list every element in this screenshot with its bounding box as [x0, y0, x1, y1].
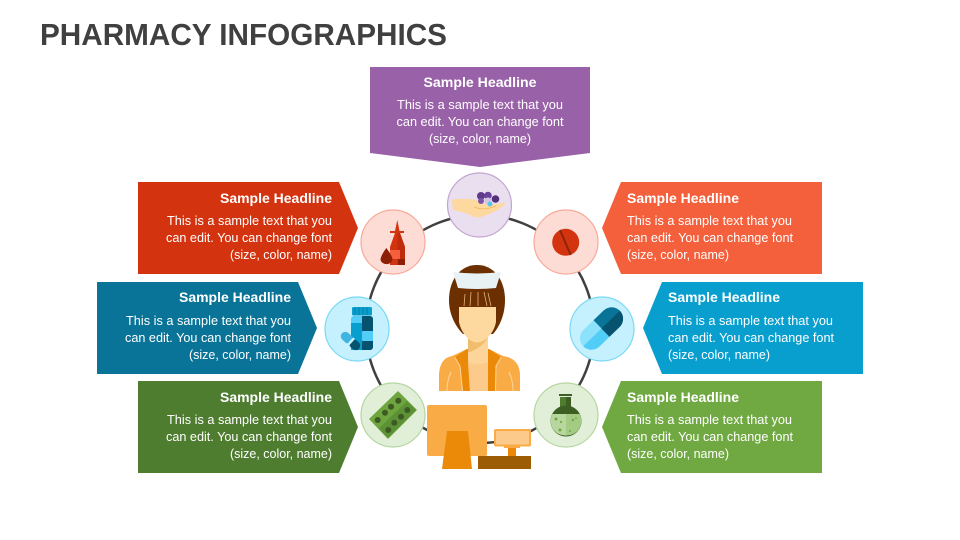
- body text: (size, color, name): [668, 348, 770, 362]
- panel: lower left green: [138, 381, 358, 473]
- body text: [166, 413, 333, 461]
- body text: This is a sample text that you: [126, 314, 291, 328]
- fringe highlights: [464, 292, 491, 306]
- body text: can edit. You can change font: [627, 231, 794, 245]
- shirt and neck: [468, 335, 488, 391]
- body text: can edit. You can change font: [668, 331, 835, 345]
- panel: upper right orange: [602, 182, 822, 274]
- panel: upper left red: [138, 182, 358, 274]
- panel shape: [370, 67, 590, 167]
- jacket: [439, 349, 520, 391]
- body text: [627, 413, 794, 461]
- panel: middle left teal: [97, 282, 317, 374]
- lapels: [455, 349, 501, 391]
- panel shape: [97, 282, 317, 374]
- body text: can edit. You can change font: [166, 231, 333, 245]
- body text: [668, 314, 835, 362]
- body text: (size, color, name): [230, 447, 332, 461]
- neck shadow: [468, 336, 488, 352]
- panel shape: [602, 381, 822, 473]
- body text: (size, color, name): [627, 447, 729, 461]
- body text: [627, 214, 794, 262]
- icon: capsule: [570, 297, 634, 361]
- body text: This is a sample text that you: [668, 314, 833, 328]
- cash register: [478, 430, 531, 469]
- heading: Sample Headline: [220, 389, 332, 405]
- body text: can edit. You can change font: [125, 331, 292, 345]
- heading: Sample Headline: [627, 389, 739, 405]
- panel: middle right blue: [643, 282, 863, 374]
- title: PHARMACY INFOGRAPHICS: [40, 18, 447, 52]
- panel shape: [138, 381, 358, 473]
- body text: [125, 314, 292, 362]
- body text: [166, 214, 333, 262]
- heading: Sample Headline: [668, 289, 780, 305]
- heading: Sample Headline: [627, 190, 739, 206]
- icon: blister pack: [361, 383, 425, 447]
- heading: Sample Headline: [220, 190, 332, 206]
- face: [459, 307, 496, 342]
- icon: flask: [534, 383, 598, 447]
- body text: This is a sample text that you: [397, 98, 563, 112]
- body text: (size, color, name): [627, 248, 729, 262]
- heading: Sample Headline: [179, 289, 291, 305]
- computer monitor: [427, 405, 487, 469]
- body text: can edit. You can change font: [627, 430, 794, 444]
- lapel highlights: [447, 358, 513, 391]
- icon: round tablet: [534, 210, 598, 274]
- body text: This is a sample text that you: [167, 214, 332, 228]
- panel shape: [643, 282, 863, 374]
- panel shape: [602, 182, 822, 274]
- icon: dropper bottle: [361, 210, 425, 274]
- body text: This is a sample text that you: [627, 413, 792, 427]
- nurse cap: [453, 272, 501, 289]
- hair: [449, 265, 505, 334]
- panel: top purple: [370, 67, 590, 167]
- panel shape: [138, 182, 358, 274]
- icon: hand holding pills: [448, 173, 512, 237]
- body text: (size, color, name): [429, 132, 531, 146]
- pharmacist figure: [439, 265, 520, 391]
- body text: This is a sample text that you: [167, 413, 332, 427]
- body text: can edit. You can change font: [396, 115, 564, 129]
- body text: can edit. You can change font: [166, 430, 333, 444]
- body text: [396, 98, 564, 146]
- heading: Sample Headline: [424, 74, 537, 90]
- ring connecting icons: [366, 215, 594, 443]
- icon: medicine bottle: [325, 297, 389, 361]
- body text: (size, color, name): [189, 348, 291, 362]
- body text: This is a sample text that you: [627, 214, 792, 228]
- panel: lower right green: [602, 381, 822, 473]
- body text: (size, color, name): [230, 248, 332, 262]
